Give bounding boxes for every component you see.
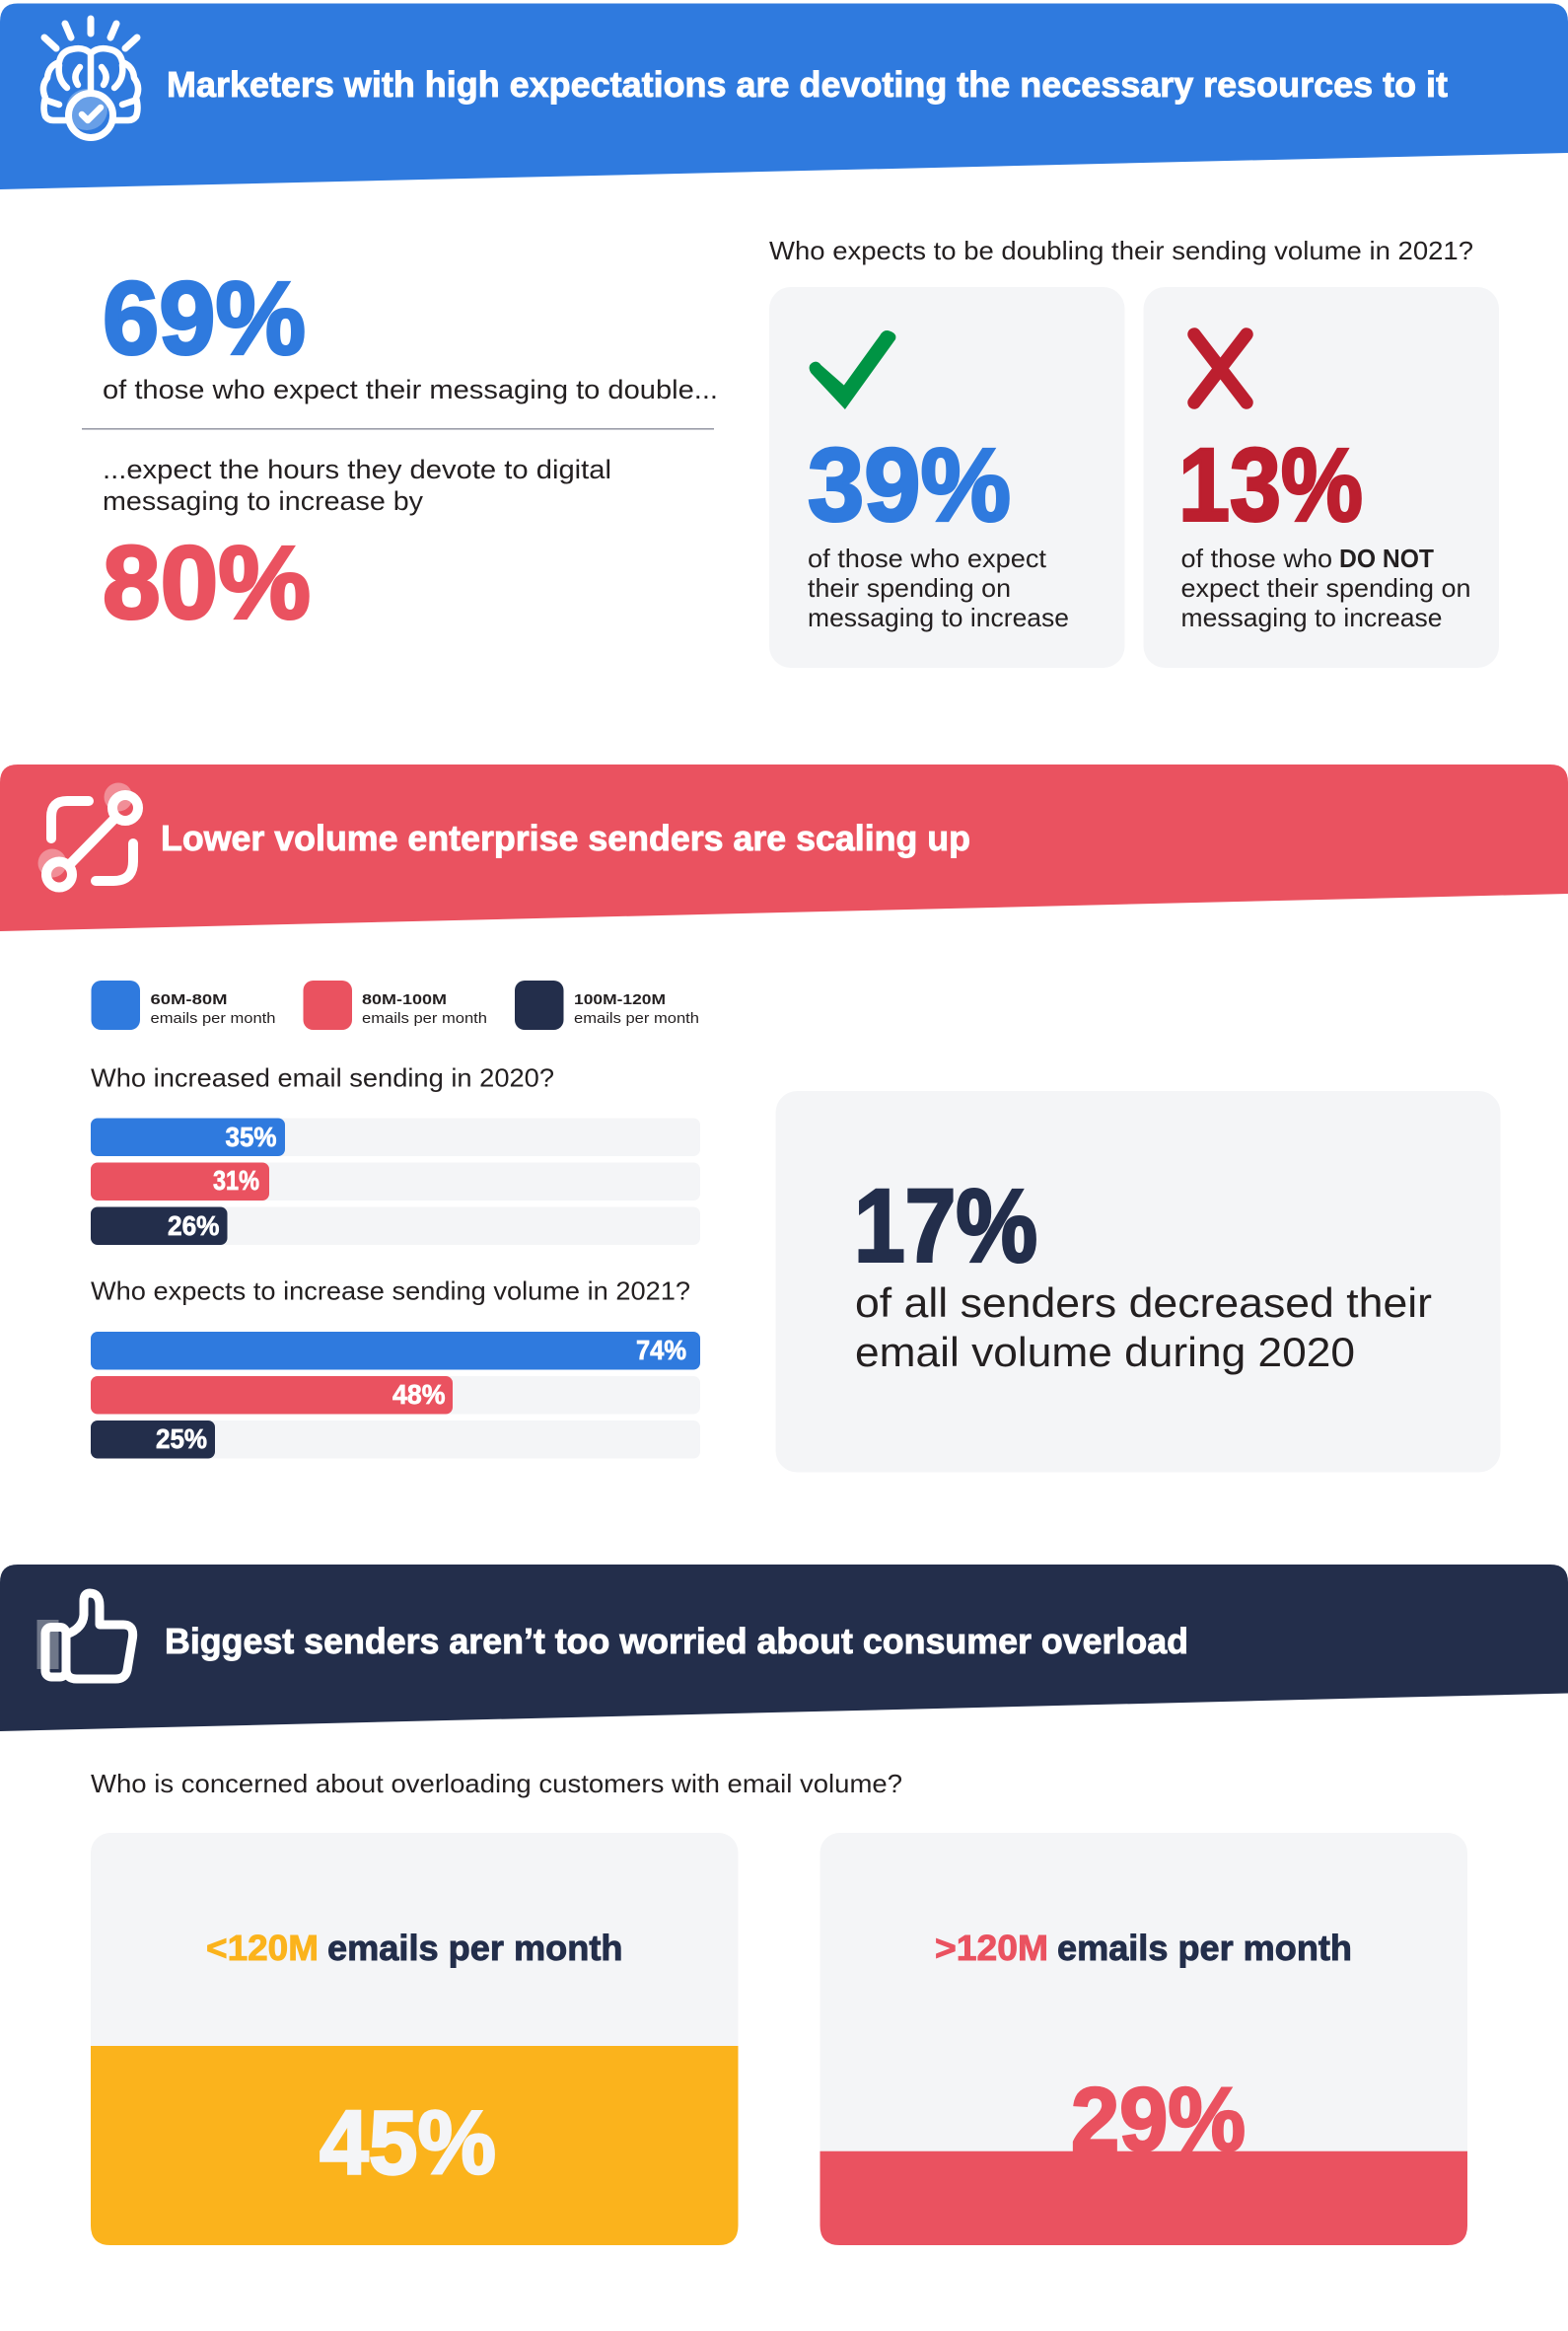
doubling question heading: Who expects to be doubling their sending volume in 2021? (769, 236, 1473, 265)
card background (775, 1091, 1501, 1472)
icon: scaling connector (37, 783, 138, 888)
39 percent figure: 39% (808, 428, 1011, 543)
section 1 header banner (0, 4, 1568, 189)
bar: 80M-100M 31 percent: 31% (213, 1165, 259, 1196)
legend item: 100M-120M (515, 981, 699, 1030)
red value block (820, 2151, 1467, 2245)
banner background (0, 765, 1568, 931)
icon: green check (810, 330, 895, 409)
panel: 17 percent callout (775, 1091, 1501, 1472)
bar: 60M-80M 35 percent: 35% (225, 1122, 277, 1152)
panel: over 120M card (820, 1833, 1467, 2245)
13 percent caption: messaging to increase (1181, 603, 1442, 632)
icon: red cross (1194, 334, 1247, 402)
bar chart: 2021 (91, 1332, 700, 1458)
section 2 header banner (0, 765, 1568, 931)
39 percent caption: their spending on (808, 573, 1011, 603)
panel: 39 percent card (769, 287, 1124, 668)
17 percent figure: 17% (854, 1168, 1037, 1284)
80 percent figure: 80% (103, 525, 311, 641)
chart heading: 2020: Who increased email sending in 2020? (91, 1063, 554, 1093)
bar chart: 2020 (91, 1119, 700, 1245)
stat: 69 percent and 80 percent (82, 260, 718, 641)
bar: 100M-120M 26 percent: 26% (168, 1210, 220, 1241)
banner background (0, 1565, 1568, 1731)
card heading: emails per month (327, 1928, 623, 1968)
orange value block (91, 2046, 738, 2245)
section 2 title: Lower volume enterprise senders are scaling up (161, 818, 970, 858)
panel: 13 percent card (1144, 287, 1499, 668)
17 percent caption: of all senders decreased their (855, 1279, 1432, 1326)
13 percent caption (1181, 544, 1471, 632)
icon: brain with check (43, 19, 138, 138)
39 percent caption: messaging to increase (808, 603, 1069, 632)
card background (91, 1833, 738, 2245)
legend item: 80M-100M (304, 981, 487, 1030)
bar: 100M-120M 25 percent (91, 1420, 700, 1458)
80 percent caption: messaging to increase by (103, 486, 424, 516)
card background (1144, 287, 1499, 668)
panel: under 120M card (91, 1833, 738, 2245)
legend item: 100M-120M: emails per month (574, 1010, 699, 1027)
legend item: 60M-80M: 60M-80M (150, 991, 227, 1008)
card background (820, 1833, 1467, 2245)
29 percent figure: 29% (1071, 2070, 1246, 2170)
45 percent figure: 45% (320, 2093, 496, 2194)
legend item: 80M-100M: emails per month (362, 1010, 487, 1027)
bar: 100M-120M 26 percent (91, 1207, 700, 1245)
80 percent caption: ...expect the hours they devote to digital (103, 455, 611, 484)
13 percent caption: expect their spending on (1181, 573, 1471, 603)
chart heading: 2021: Who expects to increase sending volume in 2021? (91, 1276, 690, 1306)
section 1 title: Marketers with high expectations are devoting the necessary resources to it (167, 64, 1448, 105)
bar: 60M-80M 74 percent: 74% (636, 1335, 686, 1365)
legend item: 60M-80M: emails per month (150, 1010, 276, 1027)
card background (769, 287, 1124, 668)
card heading: <120M (206, 1928, 319, 1968)
bar: 80M-100M 48 percent: 48% (392, 1379, 446, 1410)
39 percent caption: of those who expect (808, 544, 1047, 573)
overload question heading: Who is concerned about overloading customers with email volume? (91, 1769, 902, 1798)
icon: thumbs up (37, 1593, 133, 1679)
bar: 80M-100M 31 percent (91, 1162, 700, 1201)
legend item: 80M-100M: 80M-100M (362, 991, 447, 1008)
bar: 100M-120M 25 percent: 25% (156, 1423, 207, 1454)
13 percent caption: of those who (1181, 544, 1332, 573)
13 percent figure: 13% (1178, 428, 1363, 543)
69 percent figure: 69% (103, 260, 306, 377)
legend (91, 981, 699, 1030)
bar: 60M-80M 35 percent (91, 1119, 700, 1156)
banner background (0, 4, 1568, 189)
legend item: 100M-120M: 100M-120M (574, 991, 666, 1008)
69 percent caption: of those who expect their messaging to double... (103, 375, 718, 404)
section 3 title: Biggest senders aren’t too worried about consumer overload (165, 1621, 1188, 1661)
card heading: emails per month (1057, 1928, 1352, 1968)
bar: 60M-80M 74 percent (91, 1332, 700, 1369)
card heading: >120M (935, 1928, 1048, 1968)
legend item: 60M-80M (91, 981, 276, 1030)
bar: 80M-100M 48 percent (91, 1376, 700, 1415)
17 percent caption: email volume during 2020 (855, 1329, 1355, 1375)
section 3 header banner (0, 1565, 1568, 1731)
13 percent caption: DO NOT (1339, 544, 1434, 573)
